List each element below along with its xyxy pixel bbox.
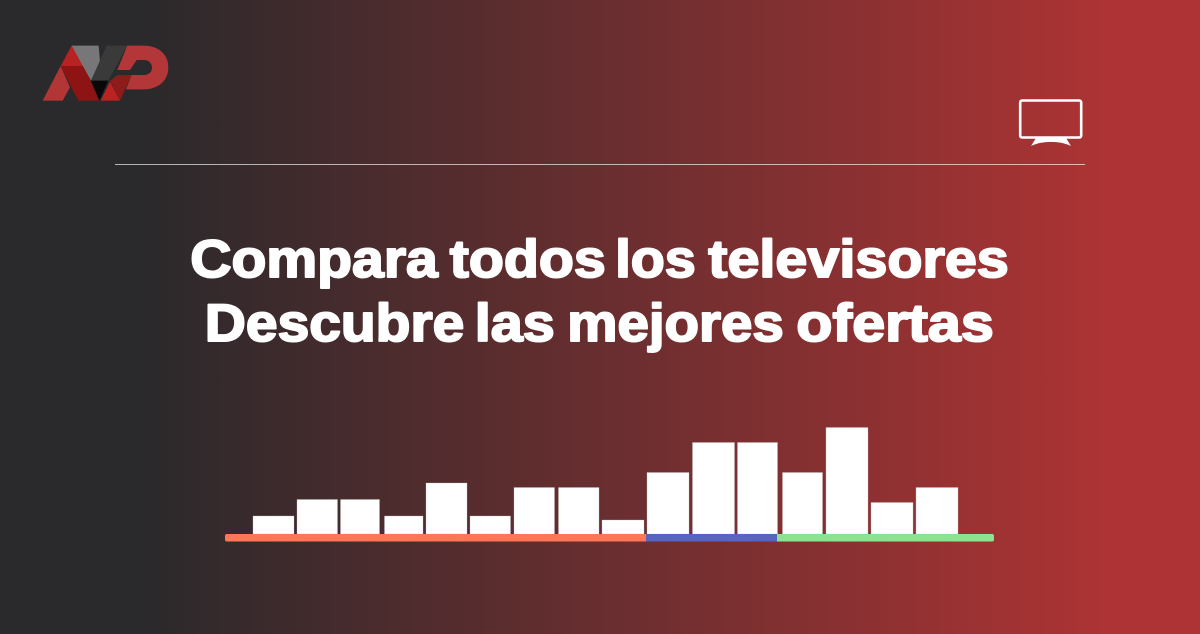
divider line [115,164,1085,165]
baseline: blue segment [646,534,777,542]
title: mejores [567,294,784,353]
logo: AVP [43,46,168,101]
title: Compara [190,230,438,289]
title [190,230,1009,353]
title: las [475,294,555,353]
baseline: orange segment [225,534,646,542]
title: Descubre [205,294,464,353]
title: ofertas [796,294,994,353]
baseline: green segment [777,534,994,542]
bar chart [225,428,994,542]
title: todos [450,230,606,289]
icon: television [1020,100,1081,146]
bars [253,428,958,534]
title: los [615,230,696,289]
title: televisores [708,230,1009,289]
